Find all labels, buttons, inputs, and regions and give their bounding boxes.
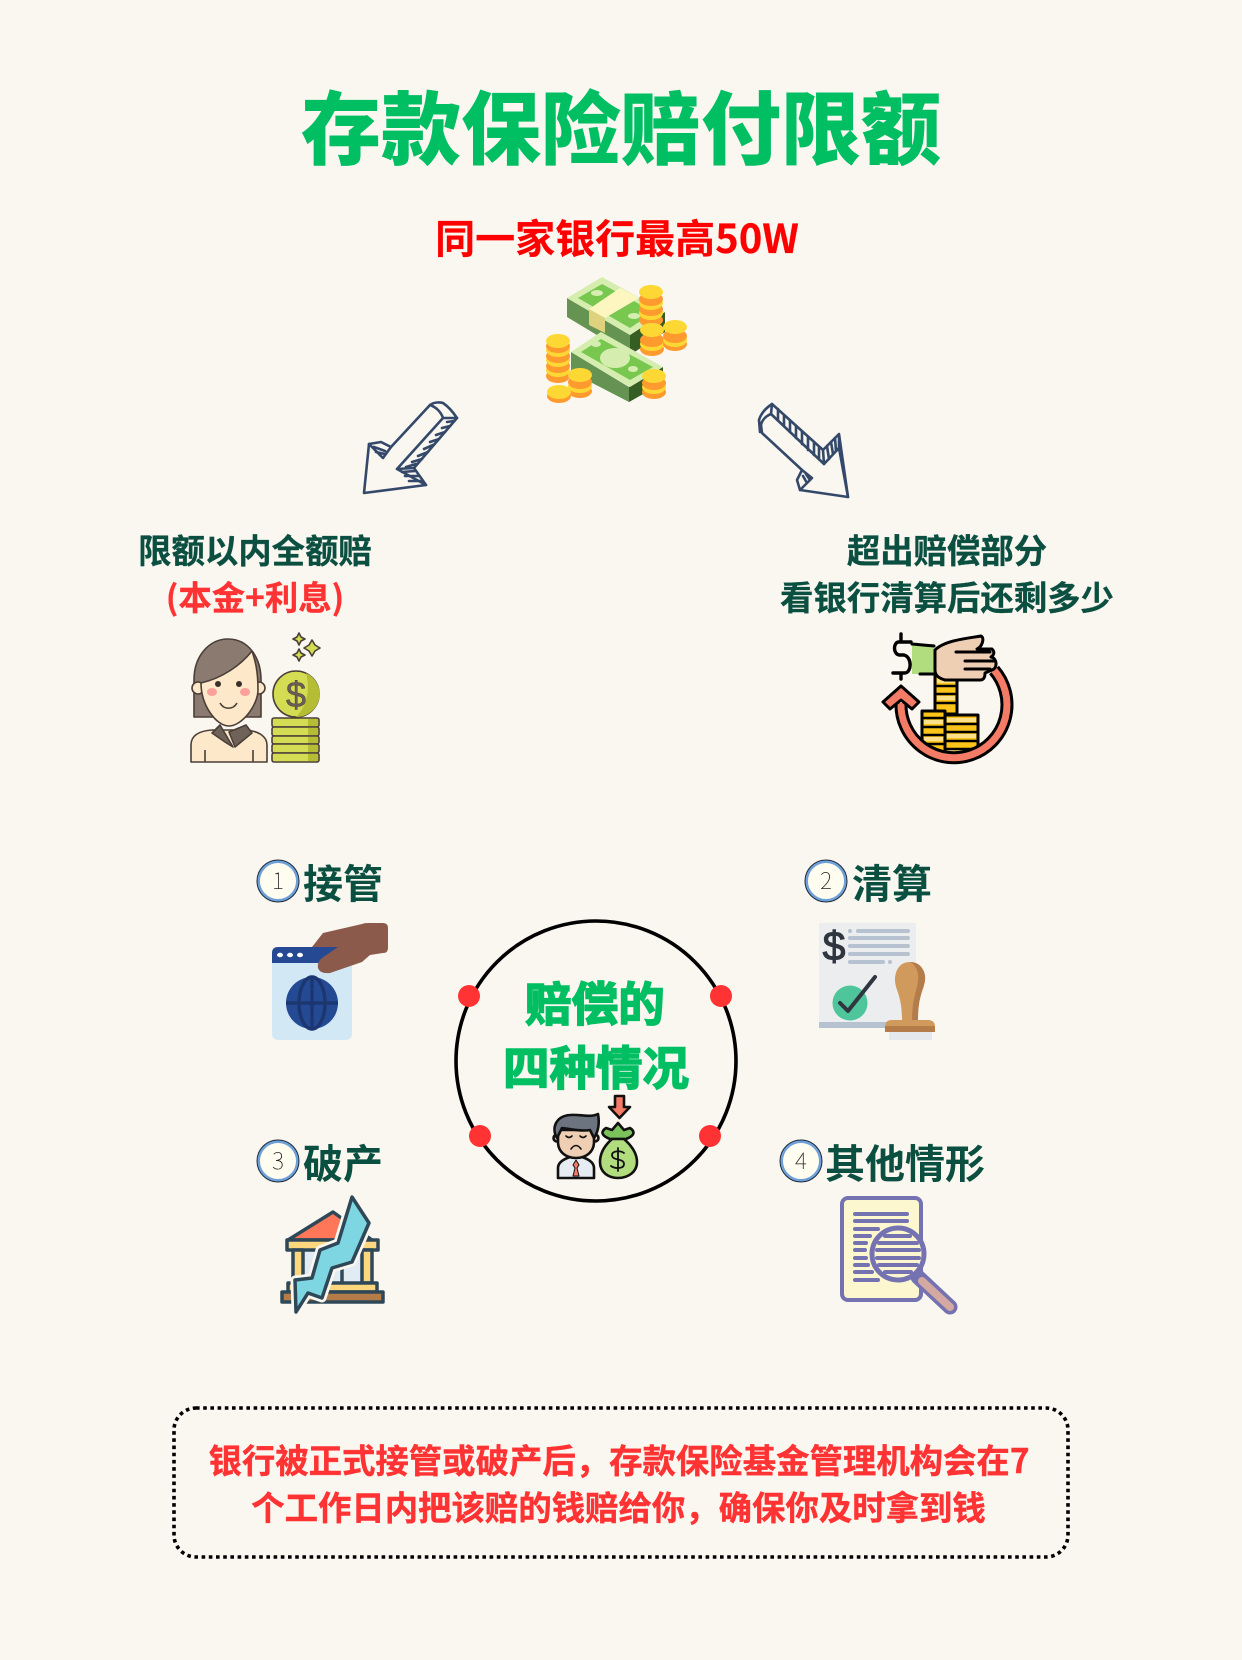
arrow: down-left bbox=[364, 402, 457, 493]
icon: hand, coins and circular arrow bbox=[883, 634, 1007, 767]
center circle bbox=[456, 921, 736, 1201]
icon: woman with coins: $ bbox=[286, 674, 306, 715]
marker dots bbox=[458, 985, 732, 1147]
icon: document with check and stamp bbox=[819, 923, 935, 1040]
text: within limit bbox=[138, 524, 372, 620]
callout: payout timing bbox=[174, 1408, 1068, 1557]
text: amount over the limit: 超出赔偿部分 bbox=[847, 524, 1047, 573]
text: within limit: 限额以内全额赔 bbox=[138, 524, 372, 573]
text: amount over the limit bbox=[780, 524, 1114, 620]
title: 存款保险赔付限额 bbox=[301, 66, 941, 182]
icon: document with magnifying glass bbox=[842, 1198, 950, 1307]
callout: payout timing: 个工作日内把该赔的钱赔给你，确保你及时拿到钱 bbox=[251, 1481, 986, 1530]
icon: money stacks and coins bbox=[546, 277, 687, 403]
step 1 heading bbox=[257, 852, 383, 910]
icon: sad man with money bag bbox=[554, 1096, 637, 1178]
center heading bbox=[503, 968, 689, 1099]
step 3 heading: 3 bbox=[272, 1142, 284, 1176]
step 4 heading: 4 bbox=[795, 1142, 807, 1176]
step 4 heading: 其他情形 bbox=[825, 1132, 985, 1190]
arrow: down-right bbox=[759, 404, 848, 497]
text: depends on liquidation: 看银行清算后还剩多少 bbox=[780, 571, 1114, 620]
step 2 heading: 清算 bbox=[852, 852, 932, 910]
icon: hand on browser window with globe bbox=[272, 923, 388, 1040]
callout: payout timing: 银行被正式接管或破产后，存款保险基金管理机构会在7 bbox=[208, 1434, 1030, 1483]
center heading: 赔偿的 bbox=[525, 968, 665, 1035]
step 1 heading: 1 bbox=[272, 862, 284, 896]
text: principal plus interest: (本金+利息) bbox=[166, 571, 344, 620]
step 2 heading bbox=[805, 852, 932, 910]
step 3 heading bbox=[257, 1132, 383, 1190]
icon: collapsing bank bbox=[282, 1197, 383, 1312]
step 1 heading: 接管 bbox=[303, 852, 383, 910]
step 3 heading: 破产 bbox=[303, 1132, 383, 1190]
step 2 heading: 2 bbox=[820, 862, 832, 896]
center heading: 四种情况 bbox=[503, 1032, 689, 1099]
subtitle: limit per bank: 同一家银行最高50W bbox=[435, 207, 799, 265]
icon: woman with coins bbox=[191, 633, 320, 762]
icon: document with check and stamp: $ bbox=[823, 923, 846, 969]
